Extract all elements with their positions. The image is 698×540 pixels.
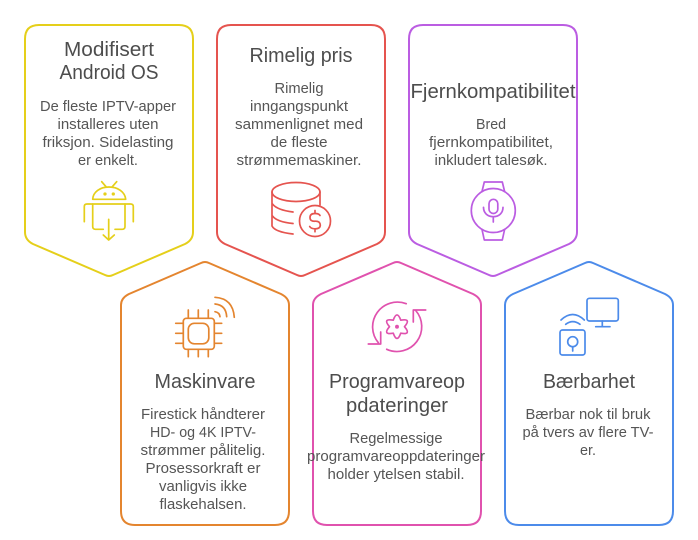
icon: gear with sync arrows bbox=[368, 302, 426, 352]
panel: Maskinvare bbox=[121, 262, 289, 525]
text block: Android description: friksjon. Sidelasting bbox=[42, 135, 174, 151]
text block: price description: inngangspunkt bbox=[250, 99, 348, 115]
heading: Modifisert Android OS: Android OS bbox=[60, 62, 158, 84]
panel: Rimelig pris bbox=[217, 25, 385, 276]
heading: Modifisert Android OS bbox=[60, 39, 158, 84]
text block: Android description: De fleste IPTV-apper bbox=[40, 99, 176, 115]
heading: Maskinvare: Maskinvare bbox=[154, 371, 256, 393]
text block: Android description: installeres uten bbox=[58, 117, 158, 133]
text block: hardware description: strømmer pålitelig. bbox=[140, 443, 266, 459]
panel: Bærbarhet bbox=[505, 262, 673, 525]
icon: chip with wifi bbox=[176, 297, 234, 357]
text block: hardware description: HD- og 4K IPTV- bbox=[150, 425, 256, 441]
text block: price description: sammenlignet med bbox=[235, 117, 363, 133]
heading: Bærbarhet: Bærbarhet bbox=[543, 371, 635, 393]
heading: Programvareoppdateringer: Programvareop bbox=[329, 371, 465, 393]
text block: updates description bbox=[307, 431, 485, 483]
icon: watch with microphone bbox=[471, 182, 515, 240]
text block: hardware description: Firestick håndterer bbox=[141, 407, 265, 423]
text block: price description: strømmemaskiner. bbox=[236, 153, 362, 169]
panel: Programvareoppdateringer bbox=[307, 262, 485, 525]
text block: hardware description: Prosessorkraft er bbox=[146, 461, 261, 477]
text block: portability description: på tvers av flere TV- bbox=[522, 425, 654, 441]
text block: updates description: holder ytelsen stabil. bbox=[328, 467, 464, 483]
text block: updates description: Regelmessige bbox=[350, 431, 442, 447]
heading: Programvareoppdateringer: pdateringer bbox=[346, 395, 448, 417]
icon: monitor and portable device bbox=[560, 298, 618, 355]
icon: coins with dollar bbox=[272, 182, 330, 236]
text block: remote description: inkludert talesøk. bbox=[434, 153, 548, 169]
text block: portability description bbox=[522, 407, 654, 459]
text block: hardware description: vanligvis ikke bbox=[159, 479, 247, 495]
text block: portability description: er. bbox=[580, 443, 596, 459]
text block: price description: de fleste bbox=[270, 135, 328, 151]
text block: price description: Rimelig bbox=[274, 81, 324, 97]
heading: Modifisert Android OS: Modifisert bbox=[64, 39, 154, 61]
heading: Rimelig pris: Rimelig pris bbox=[250, 45, 352, 67]
icon: android download bbox=[84, 182, 133, 240]
text block: hardware description: flaskehalsen. bbox=[160, 497, 246, 513]
text block: remote description bbox=[429, 117, 553, 169]
heading: Programvareoppdateringer bbox=[329, 371, 465, 417]
panel: Modifisert Android OS bbox=[25, 25, 193, 276]
text block: remote description: Bred bbox=[476, 117, 506, 133]
text block: price description bbox=[235, 81, 363, 169]
panel: Fjernkompatibilitet bbox=[409, 25, 577, 276]
text block: Android description bbox=[40, 99, 176, 169]
text block: remote description: fjernkompatibilitet, bbox=[429, 135, 553, 151]
text block: updates description: programvareoppdateringer bbox=[307, 449, 485, 465]
text block: portability description: Bærbar nok til bruk bbox=[526, 407, 651, 423]
heading: Fjernkompatibilitet: Fjernkompatibilitet bbox=[410, 81, 576, 103]
text block: Android description: er enkelt. bbox=[78, 153, 138, 169]
text block: hardware description bbox=[140, 407, 266, 513]
